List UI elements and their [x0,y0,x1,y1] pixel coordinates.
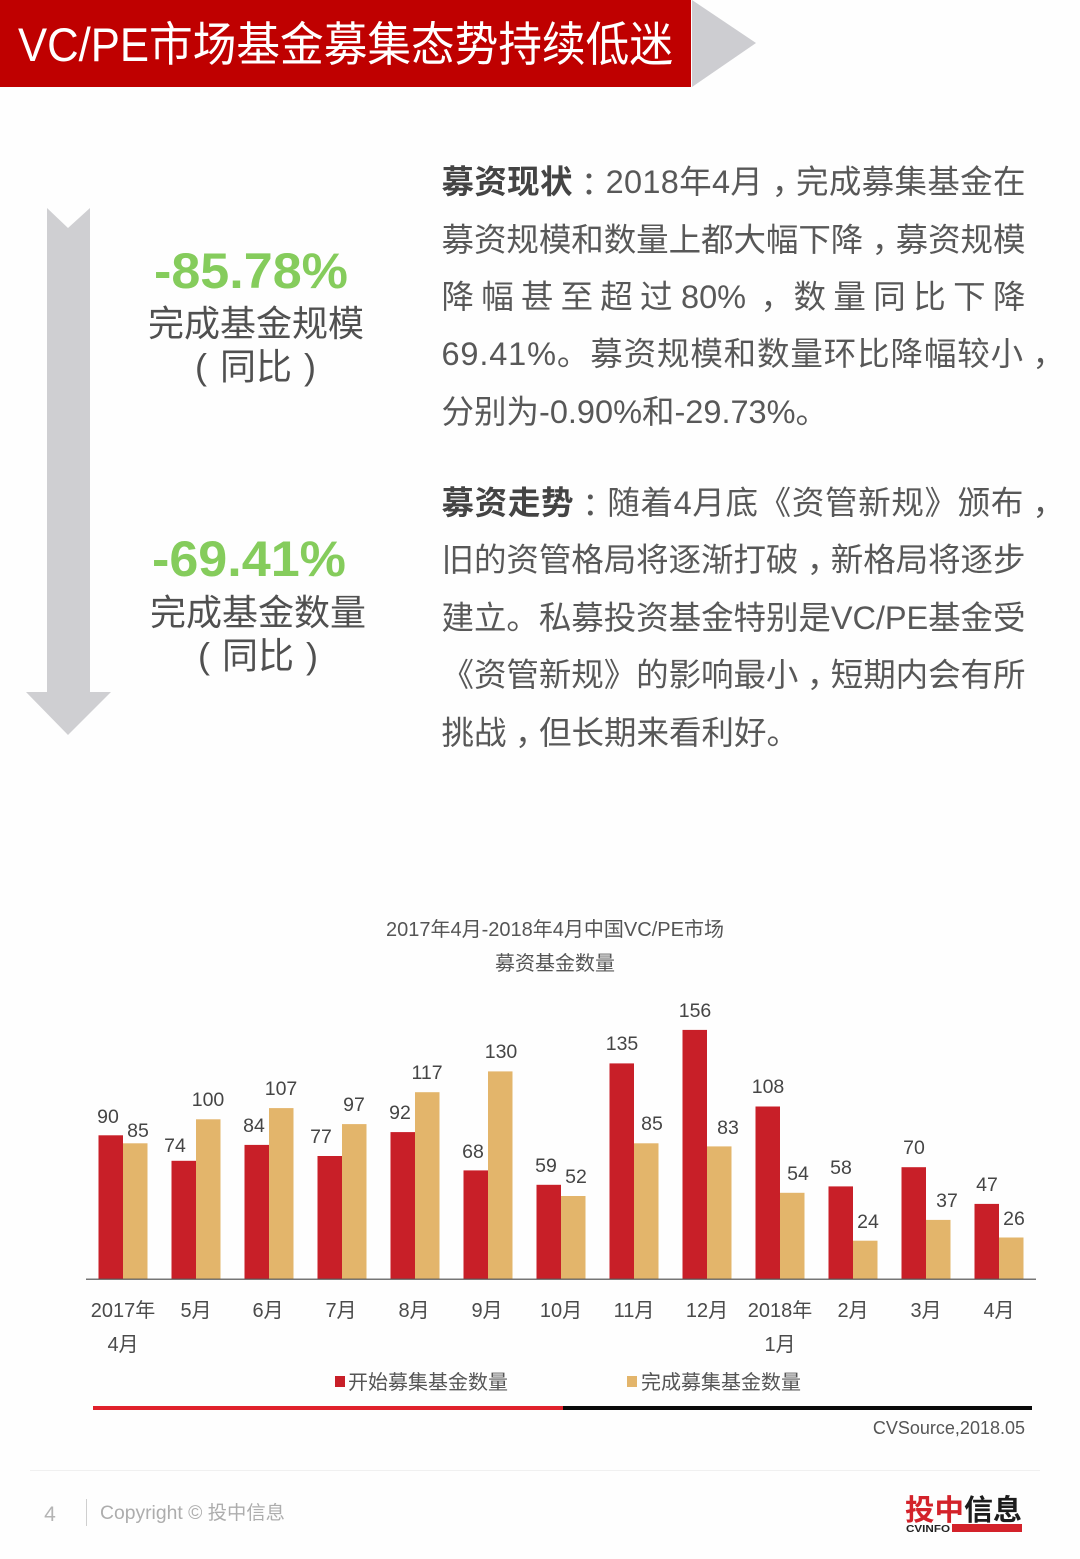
stat: fund count decline: ( [198,635,210,676]
text block: fundraising status: 分别为-0.90%和-29.73%。 [442,394,828,430]
text block: fundraising status: 募资规模 [896,222,1026,258]
text block: fundraising trend: ： [574,480,607,527]
x-axis labels: 4月 [983,1300,1015,1322]
icon: downward arrow [26,208,111,735]
text block: fundraising trend: ， [798,544,831,591]
data labels: 59 [535,1155,557,1177]
text block: fundraising status: 降幅甚至超过 [442,279,680,315]
chart legend [335,1371,801,1394]
data labels: 117 [411,1062,443,1084]
started fund bars [98,1030,999,1279]
data labels: 77 [310,1126,332,1148]
completed fund bars [123,1071,1024,1279]
x-axis labels: 6月 [252,1300,284,1322]
source note: CVSource,2018.05 [873,1418,1025,1438]
stat: fund size decline: 同比 [220,346,292,387]
logo: CVINFO: 投中 [905,1494,964,1527]
data labels: 68 [462,1141,484,1163]
stat: fund size decline [148,243,364,387]
x-axis labels: 3月 [910,1300,942,1322]
stat: fund count decline: 完成基金数量 [150,592,366,633]
text block: fundraising status [442,159,1056,430]
x-axis labels: 11月 [614,1300,654,1322]
text block: fundraising status: 完成募集基金在 [796,164,1026,200]
text block: fundraising status: 数量同比下降 [794,279,1033,315]
data labels: 70 [903,1137,925,1159]
x-axis labels: 10月 [540,1300,582,1322]
x-axis labels: 12月 [686,1300,728,1322]
bar chart: funds started vs. completed [86,1000,1036,1356]
text block: fundraising trend: 新格局将逐步 [831,542,1026,578]
footer: page number and copyright [44,1499,285,1526]
data labels: 100 [192,1089,224,1111]
text block: fundraising status: 2018年4月 [606,164,763,200]
data labels: 130 [485,1041,517,1063]
text block: fundraising trend: ， [507,717,539,764]
text block: fundraising trend: 随着4月底《资管新规》颁布 [607,485,1023,521]
stat: fund size decline: 完成基金规模 [148,303,364,344]
text block: fundraising status: ， [763,166,796,213]
x-axis labels: 5月 [180,1300,212,1322]
data labels: 156 [679,1000,711,1022]
data labels: 108 [752,1076,784,1098]
text block: fundraising trend: 旧的资管格局将逐渐打破 [442,542,798,578]
data labels: 24 [857,1211,879,1233]
data labels: 58 [830,1157,852,1179]
data labels: 92 [389,1102,411,1124]
x-axis labels: 2017年 [91,1299,155,1322]
text block: fundraising status: 80% [681,279,746,315]
text block: fundraising status: 募资现状 [442,164,572,200]
footer: page number and copyright: 4 [44,1503,56,1526]
data labels: 74 [164,1135,186,1157]
data labels: 84 [243,1115,265,1137]
stat: fund count decline: 同比 [222,635,294,676]
stat: fund size decline: ) [304,346,316,387]
text block: fundraising trend: 募资走势 [442,485,574,521]
text block: fundraising status: ， [752,281,785,328]
chart title: 募资基金数量 [495,952,615,975]
x-axis labels: 9月 [471,1300,503,1322]
data labels: 52 [565,1166,587,1188]
text block: fundraising trend: ， [1024,487,1056,534]
chart title: 2017年4月-2018年4月中国VC/PE市场 [386,918,724,941]
x-axis labels: 2月 [837,1300,869,1322]
logo: CVINFO: 信息 [964,1494,1022,1527]
text block: fundraising trend [442,480,1056,764]
stat: fund count decline: ) [306,635,318,676]
stat: fund size decline: -85.78% [154,243,348,299]
data labels: 107 [265,1078,297,1100]
chart legend: 完成募集基金数量 [641,1371,801,1394]
data labels: 97 [343,1094,365,1116]
data labels [97,1000,1025,1233]
stat: fund count decline: -69.41% [152,531,346,587]
stat: fund count decline [150,531,366,676]
text block: fundraising trend: 挑战 [442,715,507,751]
data labels: 85 [127,1120,149,1142]
text block: fundraising trend: 建立。私募投资基金特别是VC/PE基金受 [442,600,1026,636]
data labels: 54 [787,1163,809,1185]
data labels: 85 [641,1113,663,1135]
x-axis labels: 7月 [325,1300,357,1322]
text block: fundraising trend: ， [798,659,831,706]
text block: fundraising trend: 短期内会有所 [831,657,1026,693]
x-axis labels: 1月 [764,1334,796,1356]
data labels: 47 [976,1174,998,1196]
text block: fundraising status: ， [863,224,896,271]
chart legend: 开始募集基金数量 [348,1371,508,1394]
divider: red and black rule [93,1406,1032,1410]
x-axis labels: 8月 [398,1300,430,1322]
logo: CVINFO: CVINFO [906,1524,950,1535]
stat: fund size decline: ( [195,346,207,387]
text block: fundraising status: 募资规模和数量上都大幅下降 [442,222,863,258]
data labels: 90 [97,1106,119,1128]
data labels: 135 [606,1033,638,1055]
x-axis labels [91,1299,1015,1356]
text block: fundraising status: ： [573,159,605,206]
text block: fundraising trend: 《资管新规》的影响最小 [442,657,798,693]
data labels: 83 [717,1117,739,1139]
x-axis labels: 2018年 [748,1299,812,1322]
data labels: 26 [1003,1208,1025,1230]
text block: fundraising status: ， [1024,338,1056,385]
data labels: 37 [936,1190,958,1212]
title banner: VC/PE市场基金募集态势持续低迷 [18,18,673,71]
text block: fundraising status: 69.41%。募资规模和数量环比降幅较小 [442,336,1023,372]
text block: fundraising trend: 但长期来看利好。 [539,715,799,751]
logo: CVINFO [905,1494,1022,1535]
chart title [386,918,724,975]
title banner [0,0,756,87]
footer: page number and copyright: Copyright © 投中信息 [100,1502,285,1524]
x-axis labels: 4月 [107,1334,139,1356]
